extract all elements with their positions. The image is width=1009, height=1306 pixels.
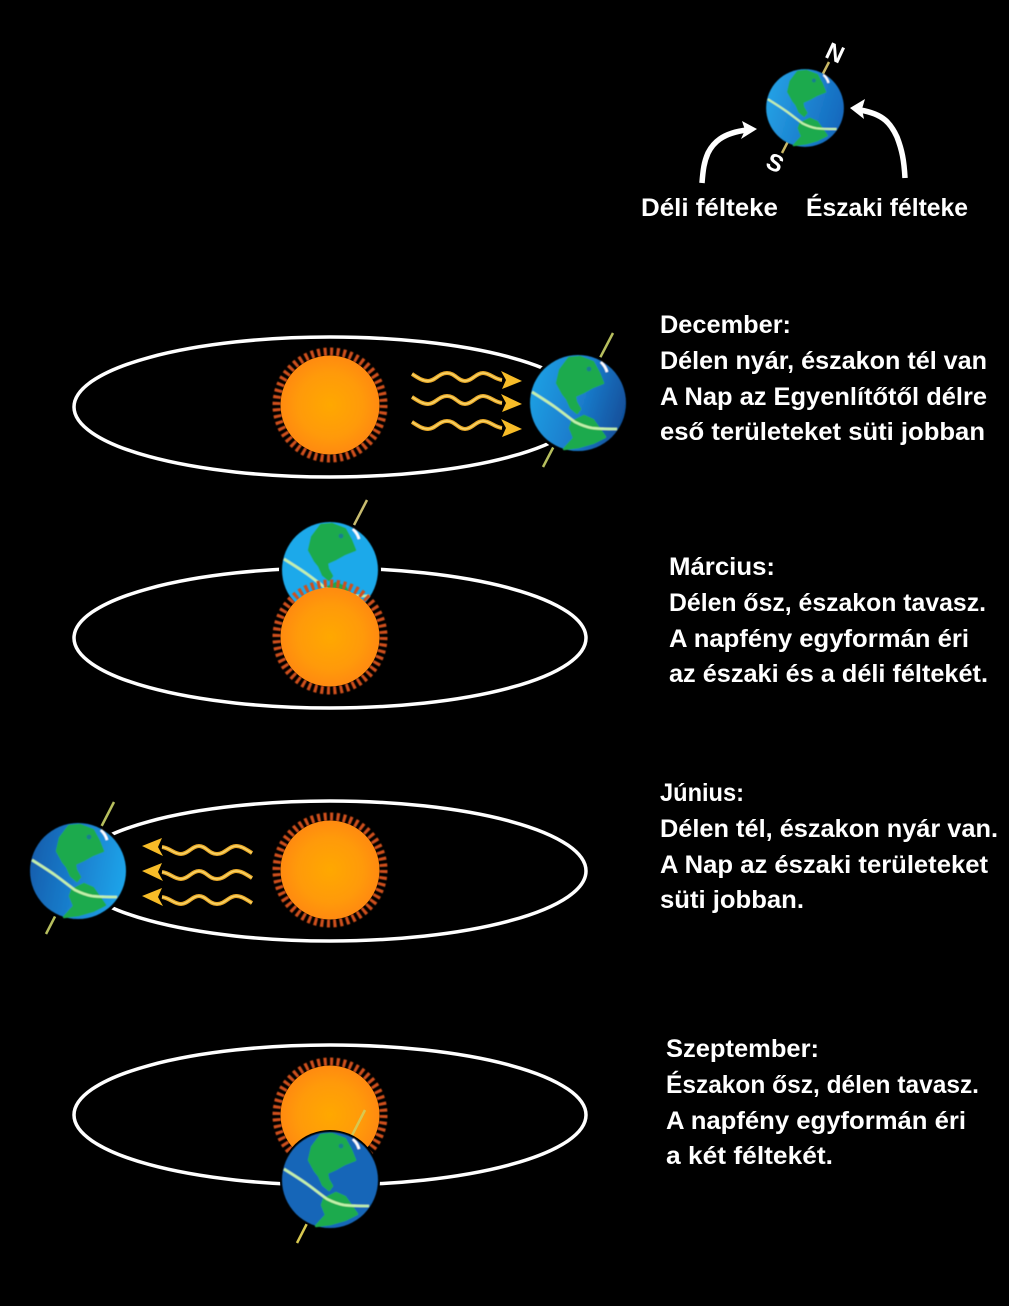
earth axis [782,62,829,153]
panel: december diagram [74,333,629,477]
arrow: southern hemisphere [702,121,757,183]
label: northern hemisphere: Északi félteke [806,193,968,222]
text: june: süti jobban. [660,886,804,914]
orbit [74,337,586,477]
sun rays arrows [142,838,252,906]
orbit [74,568,586,708]
earth [279,519,381,621]
panel: june diagram [27,801,586,941]
text: september: Északon ősz, délen tavasz. [666,1070,979,1099]
text: december: eső területeket süti jobban [660,418,985,446]
text: march: az északi és a déli féltekét. [669,660,988,688]
earth axis [543,333,613,467]
label: S: S [762,148,788,179]
label: southern hemisphere: Déli félteke [641,194,778,222]
earth axis [46,802,114,934]
text: march [669,553,988,688]
text: september: a két féltekét. [666,1142,833,1170]
text: march: Március: [669,553,775,581]
icon: earth [766,69,844,147]
text: december: Délen nyár, északon tél van [660,347,987,375]
sun [276,1062,384,1168]
text: june: A Nap az északi területeket [660,851,989,879]
text: september: A napfény egyformán éri [666,1107,966,1135]
text: september: Szeptember: [666,1035,819,1063]
text: june: Délen tél, északon nyár van. [660,815,998,843]
panel: hemispheres key [641,38,968,222]
text: march: A napfény egyformán éri [669,625,969,653]
earth axis [297,1110,365,1243]
text: june [660,779,998,914]
panel: september diagram [74,1045,586,1243]
sun [276,352,384,458]
sun rays arrows [412,371,522,437]
text: june: Június: [660,779,744,807]
text: september [666,1035,979,1170]
earth [527,352,629,454]
orbit [74,801,586,941]
arrow: northern hemisphere [850,99,905,178]
earth [27,820,129,922]
sun [276,584,384,690]
sun [276,816,384,924]
panel: march diagram [74,500,586,708]
text: december: December: [660,311,791,339]
text: december [660,311,987,446]
earth [280,1130,380,1230]
label: N: N [821,38,848,69]
text: march: Délen ősz, északon tavasz. [669,589,986,617]
text: december: A Nap az Egyenlítőtől délre [660,383,987,411]
earth axis [340,500,367,552]
orbit [74,1045,586,1185]
